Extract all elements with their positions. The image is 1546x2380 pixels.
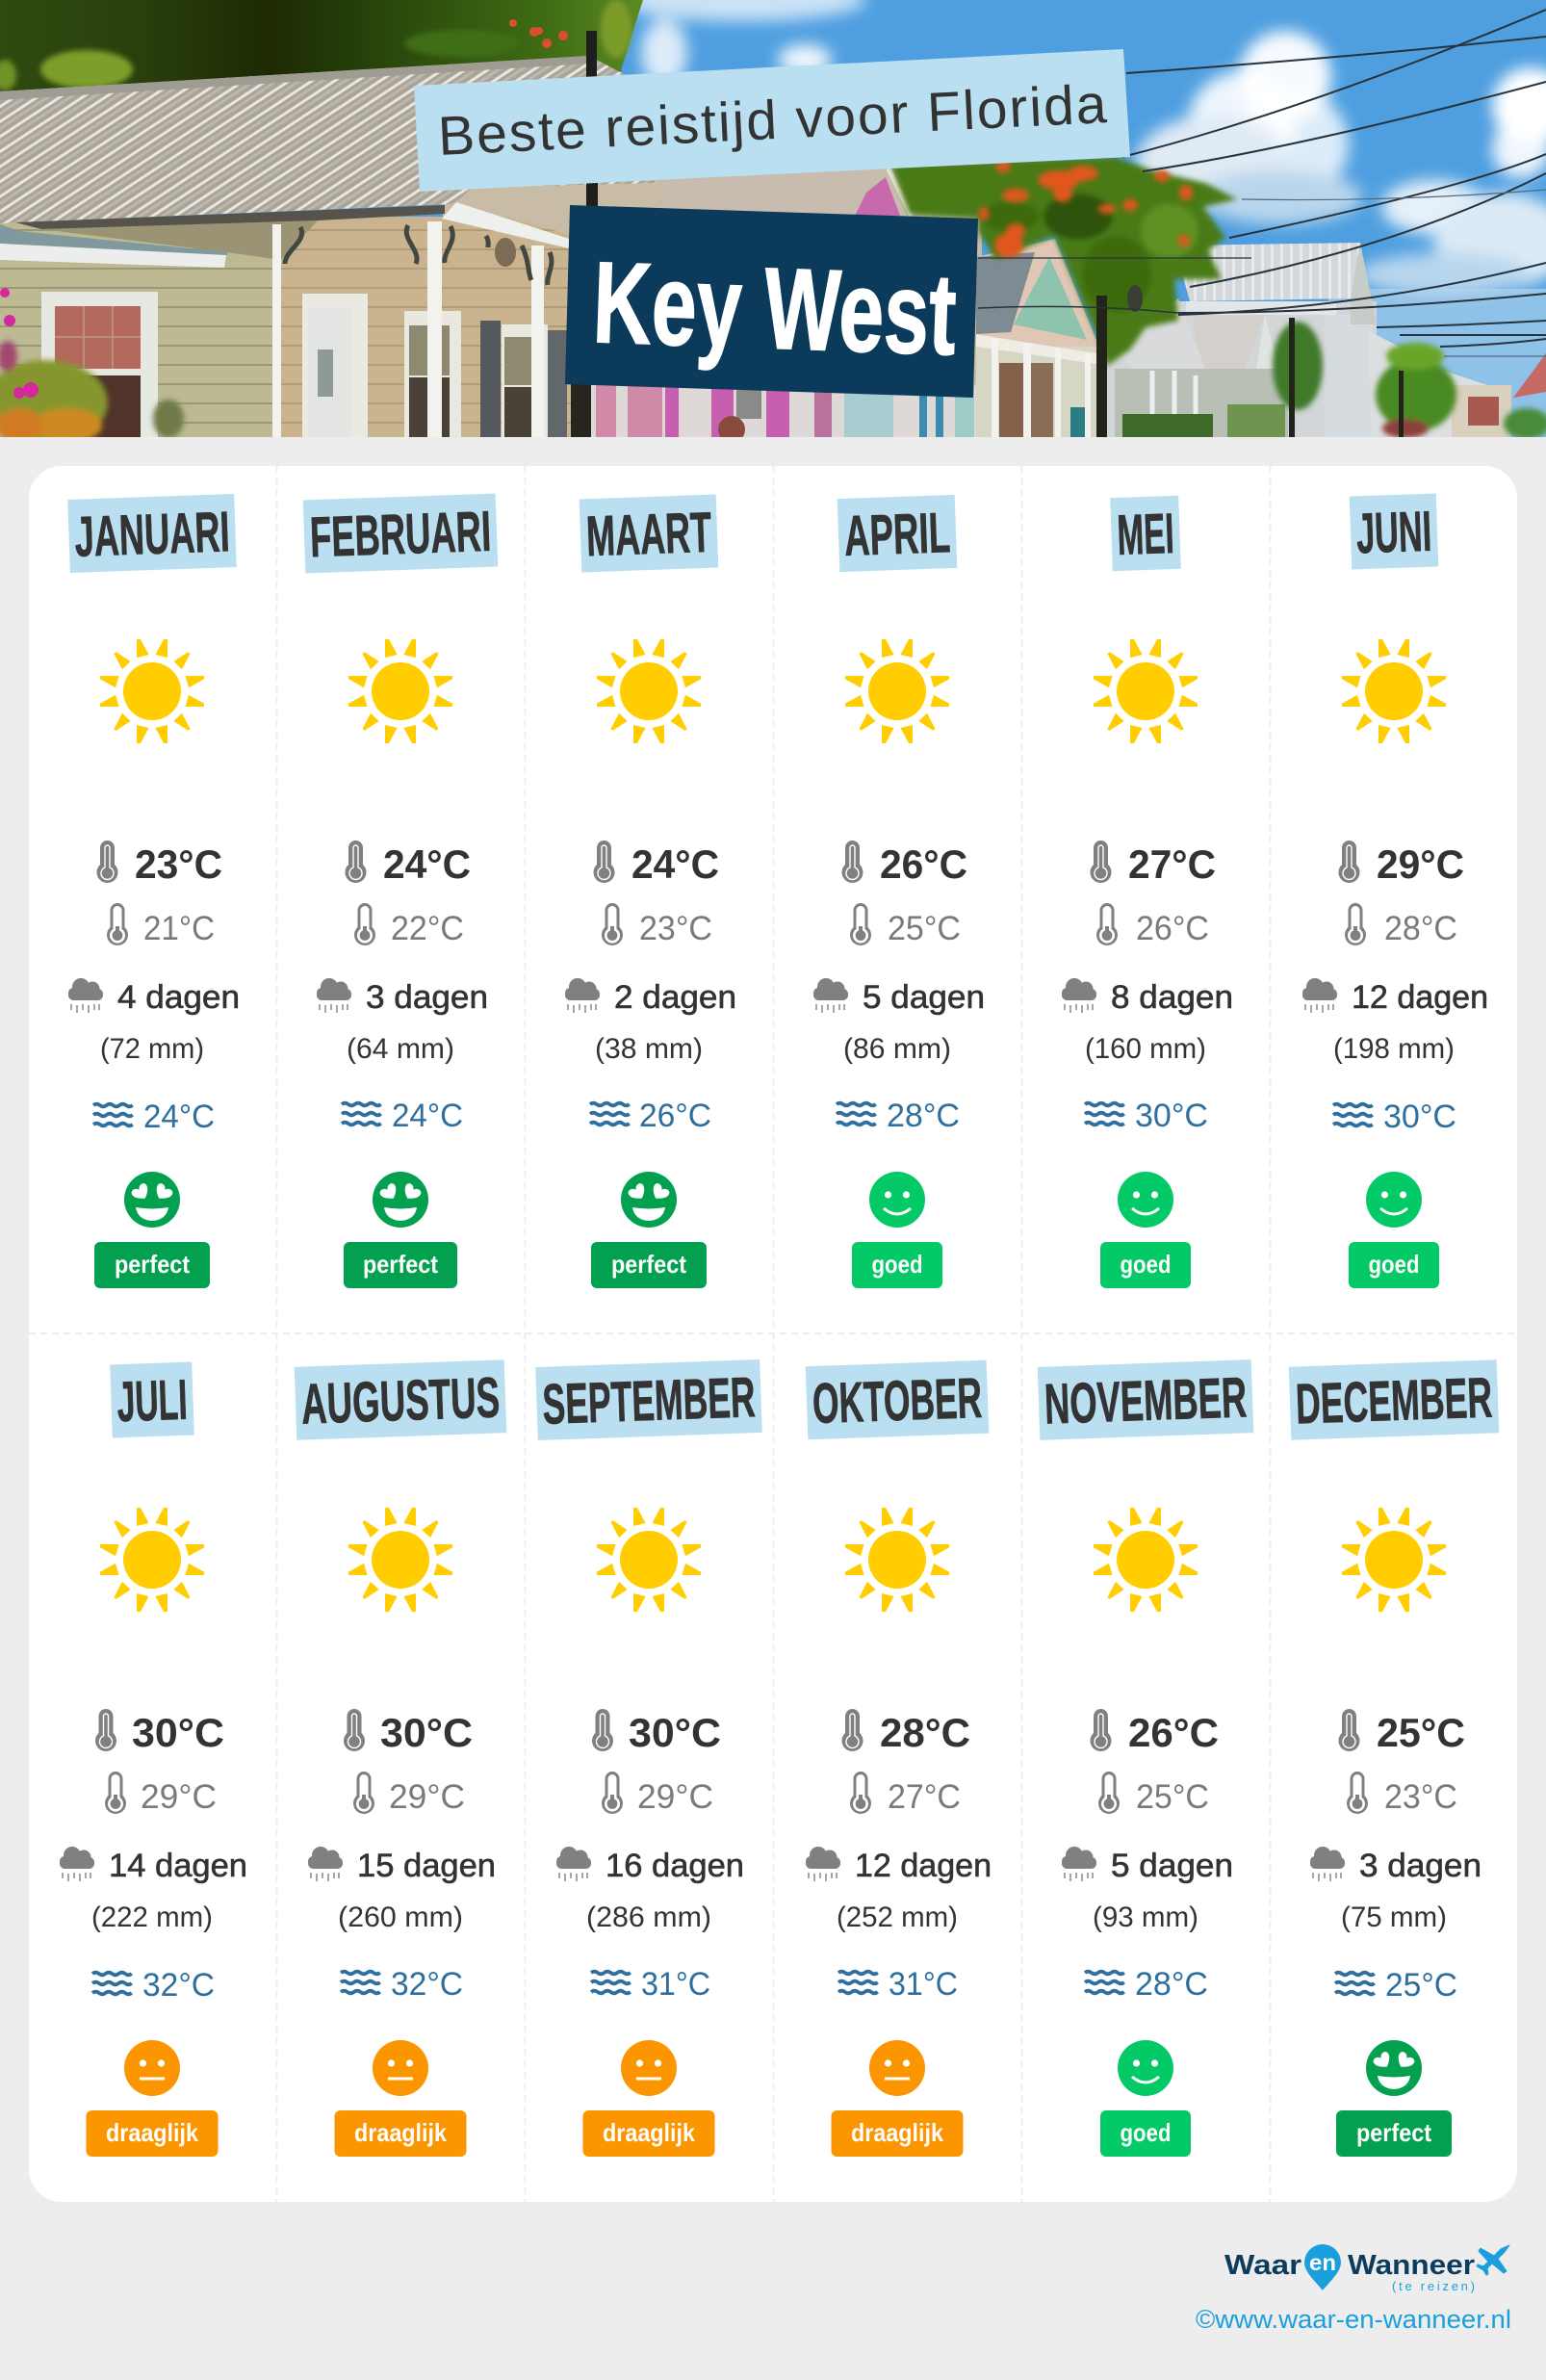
rating badge: draaglijk [603,2118,695,2147]
white houses [1107,301,1377,437]
month label: JUNI [1355,500,1432,565]
month label: APRIL [843,501,951,568]
month label: JULI [116,1368,189,1434]
month: februari [303,494,498,1288]
rainfall: (222 mm) [91,1901,213,1933]
rain days [317,978,488,1016]
low temperature [1347,1772,1457,1816]
icon: sun [845,1508,949,1612]
icon: sun [845,639,949,743]
month label [535,1359,762,1440]
rain days: 8 dagen [1111,979,1233,1016]
rating badge: perfect [611,1250,686,1279]
flowering tree [890,157,1237,366]
month label [837,495,957,572]
low temperature [850,903,961,947]
month label [806,1360,989,1439]
month label [580,495,718,572]
sea temperature [591,1966,710,2003]
high temperature: 24°C [383,841,471,887]
sea temperature [837,1098,960,1134]
low temperature: 21°C [143,910,215,947]
rating badge [1349,1242,1439,1288]
rainfall: (160 mm) [1085,1033,1206,1065]
rainfall: (64 mm) [347,1033,454,1065]
footer url: ©www.waar-en-wanneer.nl [1196,2305,1511,2334]
sea temperature: 32°C [391,1966,463,2003]
panel: weather card [29,466,1517,2202]
sea temperature [590,1098,711,1134]
rating badge: goed [872,1250,922,1279]
rating badge [852,1242,942,1288]
rating badge [94,1242,210,1288]
icon: rating face [621,1172,677,1228]
sea temperature: 30°C [1383,1099,1456,1135]
high temperature: 30°C [132,1710,224,1755]
palms [1273,322,1546,439]
sea temperature: 25°C [1385,1967,1457,2004]
high temperature [593,841,719,887]
rating badge [1100,1242,1191,1288]
rainfall: (252 mm) [837,1901,958,1933]
high temperature: 28°C [880,1710,970,1755]
icon: rating face [869,2040,925,2096]
month: september [535,1359,762,2157]
rating badge [87,2110,218,2157]
rain days: 5 dagen [863,979,985,1016]
rating badge [344,1242,457,1288]
month label [295,1359,506,1440]
month: november [1038,1359,1253,2157]
sea temperature: 32°C [142,1967,215,2004]
month label [1110,496,1181,571]
low temperature: 28°C [1384,910,1457,947]
sea temperature: 24°C [143,1099,215,1135]
low temperature: 23°C [1384,1778,1457,1816]
rainfall: (286 mm) [586,1901,711,1933]
rain days [565,978,736,1016]
sea temperature: 31°C [641,1966,710,2003]
month: augustus [295,1359,506,2157]
windows, door, shutters and columns [41,292,158,437]
icon: map pin [1304,2244,1341,2290]
rating badge: perfect [115,1250,190,1279]
icon: rating face [1118,2040,1173,2096]
high temperature [1090,841,1216,887]
subtitle tag: Beste reistijd voor Florida: Beste reistijd voor Florida [437,73,1108,168]
subtitle tag: Beste reistijd voor Florida [414,49,1130,192]
month label: JANUARI [73,500,231,569]
rain days: 14 dagen [109,1848,247,1884]
sea temperature: 26°C [639,1098,711,1134]
high temperature: 23°C [135,841,222,887]
title tag: Key West: Key West [591,238,959,379]
high temperature: 26°C [880,841,967,887]
icon: sun [100,1508,204,1612]
rainfall: (38 mm) [595,1033,703,1065]
rainfall: (72 mm) [100,1033,204,1065]
icon: rating face [1366,2040,1422,2096]
rainfall: (260 mm) [338,1901,463,1933]
high temperature: 25°C [1377,1710,1465,1755]
icon: rating face [124,1172,180,1228]
icon: sun [1342,639,1446,743]
rating badge: goed [1121,2118,1171,2147]
rating badge: goed [1121,1250,1171,1279]
rain days: 2 dagen [614,979,736,1016]
low temperature [602,903,712,947]
rain days: 5 dagen [1111,1848,1233,1884]
rating badge: perfect [1356,2118,1431,2147]
sea temperature: 24°C [392,1098,463,1134]
sea temperature [1333,1099,1456,1135]
high temperature [95,1709,224,1755]
rainfall: (198 mm) [1333,1033,1455,1065]
low temperature: 29°C [389,1778,465,1816]
rain days: 15 dagen [357,1848,496,1884]
high temperature: 30°C [629,1710,721,1755]
icon: rating face [373,1172,428,1228]
high temperature [841,1709,970,1755]
month: januari [67,494,240,1288]
high temperature: 27°C [1128,841,1216,887]
sea temperature: 28°C [887,1098,960,1134]
icon: rating face [621,2040,677,2096]
high temperature [841,841,967,887]
high temperature [344,1709,473,1755]
sea temperature: 31°C [889,1966,958,2003]
low temperature [353,1772,465,1816]
icon: sun [597,1508,701,1612]
icon: sun [348,1508,452,1612]
rating badge [335,2110,466,2157]
rating badge: perfect [363,1250,438,1279]
low temperature [1345,903,1457,947]
high temperature [1090,1709,1219,1755]
icon: rating face [1118,1172,1173,1228]
icon: sun [1094,639,1198,743]
rating badge: draaglijk [851,2118,943,2147]
month label: SEPTEMBER [541,1365,757,1436]
footer logo: Waar en Wanneer: Waar [1224,2250,1301,2281]
rain days [1062,978,1233,1016]
sea temperature: 30°C [1135,1098,1208,1134]
sea temperature [93,1099,215,1135]
high temperature [345,841,471,887]
rain days [68,978,240,1016]
wires [978,10,1546,356]
low temperature: 23°C [639,910,712,947]
month label: NOVEMBER [1044,1365,1248,1436]
high temperature [1338,1709,1465,1755]
high temperature [592,1709,721,1755]
sea temperature [342,1098,463,1134]
sea temperature [1085,1098,1208,1134]
low temperature: 22°C [391,910,464,947]
month label [110,1362,194,1437]
month: maart [565,495,736,1288]
month: juli [60,1362,247,2157]
low temperature [1096,903,1209,947]
rain days [1062,1847,1233,1884]
icon: sun [1094,1508,1198,1612]
high temperature [1338,841,1464,887]
low temperature: 25°C [888,910,961,947]
low temperature [1098,1772,1209,1816]
icon: sun [100,639,204,743]
low temperature [850,1772,961,1816]
icon: rating face [124,2040,180,2096]
month: oktober [806,1360,992,2157]
rainfall: (75 mm) [1341,1901,1447,1933]
icon: map pin: en [1309,2250,1336,2275]
rain days [1310,1847,1482,1884]
low temperature: 27°C [888,1778,961,1816]
big roof [0,56,664,223]
low temperature: 26°C [1136,910,1209,947]
month: juni [1302,493,1488,1288]
sea temperature [838,1966,958,2003]
footer logo: Waar en Wanneer [1224,2244,1509,2293]
sea temperature [1335,1967,1457,2004]
low temperature: 29°C [141,1778,217,1816]
icon: sun [597,639,701,743]
footer logo: Waar en Wanneer: Wanneer [1348,2250,1475,2281]
month label: MEI [1116,502,1175,567]
rainfall: (93 mm) [1093,1901,1198,1933]
low temperature [354,903,464,947]
rating badge [1100,2110,1191,2157]
footer logo: Waar en Wanneer: (te reizen) [1392,2279,1475,2293]
pink and blue houses [591,385,976,437]
rainfall: (86 mm) [843,1033,951,1065]
rating badge [583,2110,714,2157]
month label [1038,1359,1253,1440]
icon: sun [348,639,452,743]
rating badge: goed [1369,1250,1419,1279]
tree top left [0,0,643,96]
high temperature: 26°C [1128,1710,1219,1755]
sea temperature [1085,1966,1208,2003]
icon: plane [1477,2245,1509,2275]
high temperature [96,841,222,887]
rain days: 12 dagen [1352,979,1488,1016]
month label [67,494,237,573]
rating badge: draaglijk [106,2118,198,2147]
sea temperature [341,1966,463,2003]
month: april [813,495,985,1288]
title tag: Key West [565,205,978,398]
sea temperature: 28°C [1135,1966,1208,2003]
month label: OKTOBER [812,1366,983,1436]
high temperature: 24°C [631,841,719,887]
high temperature: 30°C [380,1710,473,1755]
rating badge: draaglijk [354,2118,447,2147]
sea temperature [92,1967,215,2004]
month label [303,494,498,573]
walls [443,96,982,395]
teal house [976,239,1096,353]
icon: sun [1342,1508,1446,1612]
low temperature: 29°C [637,1778,713,1816]
rating badge [1336,2110,1452,2157]
month label: MAART [585,501,712,568]
rain days: 12 dagen [855,1848,992,1884]
rain days: 4 dagen [117,979,240,1016]
month: december [1289,1359,1499,2157]
flowers lower left [0,341,184,445]
rain days: 3 dagen [1359,1848,1482,1884]
header photo: Key West street [0,0,1546,445]
icon: rating face [373,2040,428,2096]
icon: rating face [869,1172,925,1228]
month label: AUGUSTUS [300,1365,501,1436]
rain days [813,978,985,1016]
low temperature [107,903,215,947]
low temperature: 25°C [1136,1778,1209,1816]
rating badge [591,1242,707,1288]
icon: rating face [1366,1172,1422,1228]
rain days: 3 dagen [366,979,488,1016]
rating badge [832,2110,963,2157]
month: mei [1062,496,1233,1288]
month label: FEBRUARI [309,500,492,569]
low temperature [105,1772,217,1816]
month label [1350,493,1438,570]
low temperature [602,1772,713,1816]
high temperature: 29°C [1377,841,1464,887]
rain days: 16 dagen [606,1848,744,1884]
